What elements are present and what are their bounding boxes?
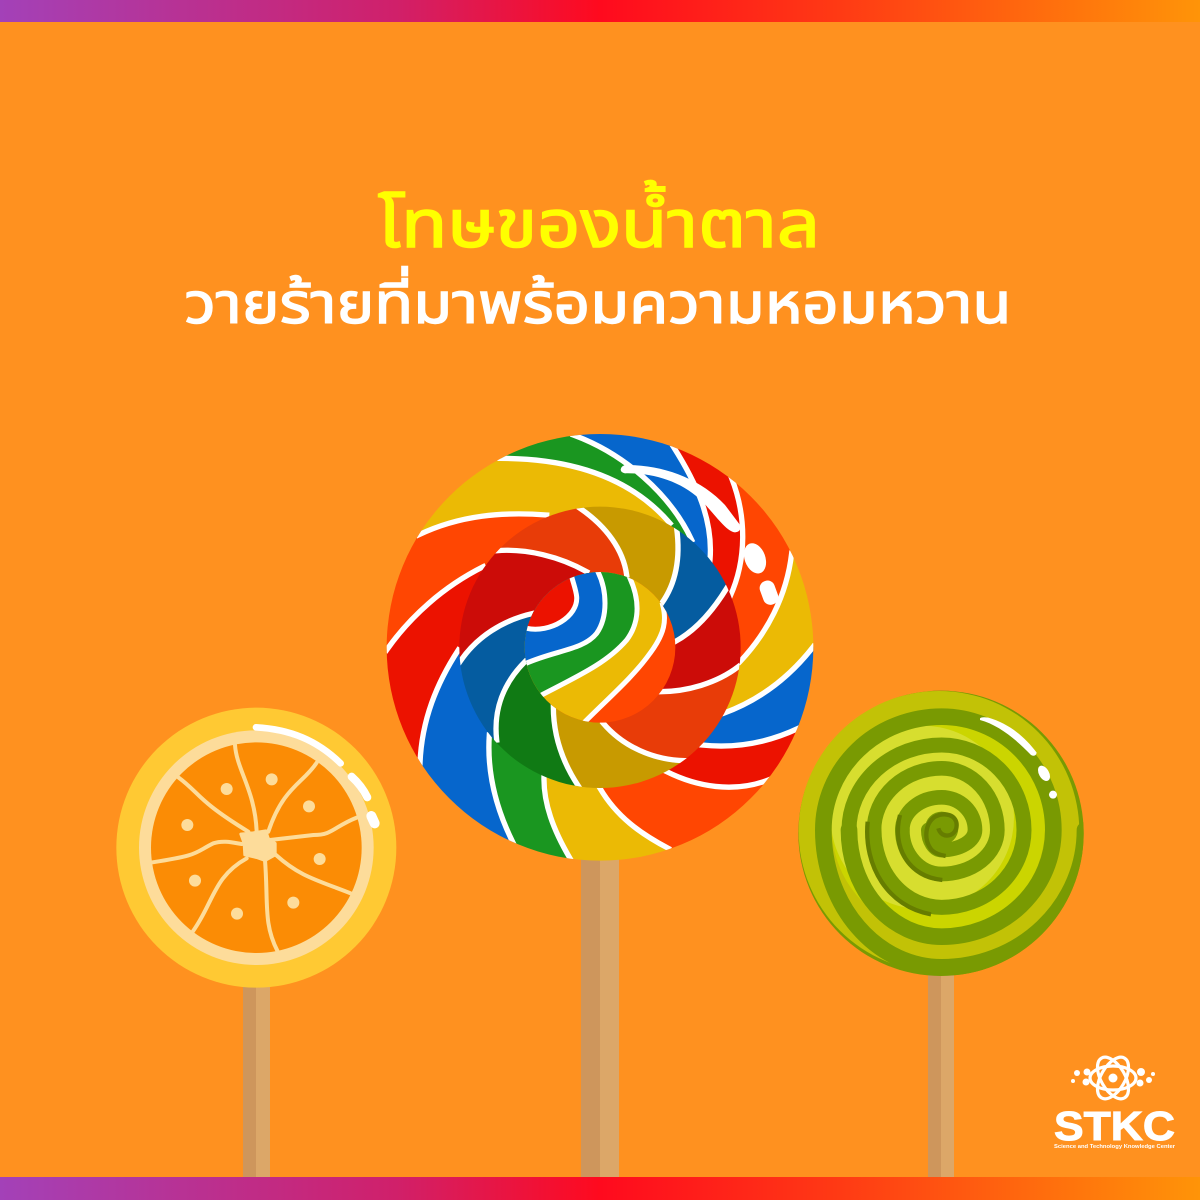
heading line 2: วายร้ายที่มาพร้อมความหอมหวาน — [184, 266, 1012, 335]
STKC logo — [1054, 1052, 1176, 1150]
logo tagline: Science and Technology Knowledge Center — [1054, 1144, 1176, 1150]
top gradient bar — [0, 0, 1200, 22]
orange lollipop highlights — [256, 727, 375, 823]
spiral shadows — [867, 814, 957, 914]
orange segments — [153, 745, 357, 951]
middle swirl ring — [459, 506, 741, 788]
green lollipop highlights — [980, 717, 1057, 799]
stick: big lollipop — [581, 855, 619, 1177]
bottom gradient bar — [0, 1177, 1200, 1200]
title — [184, 180, 1012, 335]
outer swirl ring — [386, 434, 814, 861]
stick: orange lollipop — [243, 980, 270, 1177]
lime candy disc — [832, 720, 1045, 933]
logo wordmark: STKC — [1054, 1103, 1175, 1149]
big lollipop highlights — [621, 465, 780, 607]
orange seeds — [181, 773, 326, 920]
icon: atom — [1090, 1052, 1136, 1104]
orange core — [241, 831, 275, 861]
heading line 1: โทษของน้ำตาล — [378, 180, 820, 261]
logo dots — [1071, 1068, 1155, 1086]
orange slice lollipop — [116, 708, 396, 988]
green spiral — [823, 717, 1085, 967]
green spiral lollipop — [798, 691, 1085, 976]
inner swirl core — [524, 572, 676, 723]
stick: green lollipop — [928, 970, 954, 1177]
big rainbow lollipop — [386, 434, 814, 861]
